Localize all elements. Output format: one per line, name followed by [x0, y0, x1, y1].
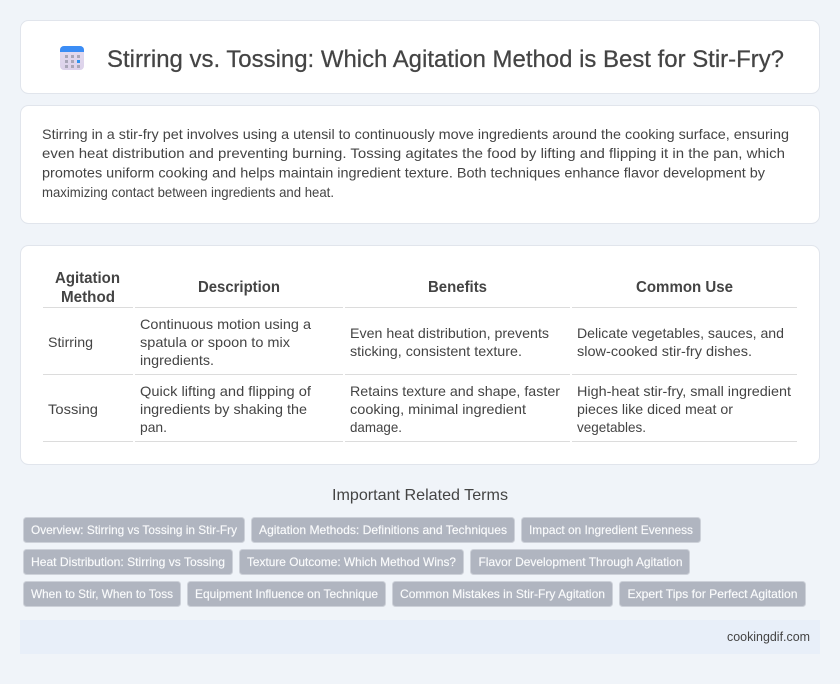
table row: stirring: Delicate vegetables, sauces, and [577, 325, 784, 341]
table row: stirring: Even heat distribution, prevents [350, 325, 549, 341]
intro paragraph: maximizing contact between ingredients and heat. [42, 184, 334, 200]
footer bar [20, 620, 820, 654]
intro paragraph: even heat distribution and preventing burning. Tossing agitates the food by lifting and flipping it in the pan, which [42, 145, 785, 161]
intro paragraph: Stirring in a stir-fry pet involves using a utensil to continuously move ingredients around the cooking surface, ensuring [42, 126, 789, 142]
title: Stirring vs. Tossing: Which Agitation Method is Best for Stir-Fry? [107, 46, 784, 73]
chip: evenness [522, 518, 700, 542]
chip: overview [24, 518, 244, 542]
table row: stirring [48, 316, 784, 368]
table row: stirring: Continuous motion using a [140, 316, 311, 332]
table header [55, 270, 733, 306]
icon: calendar [60, 46, 84, 70]
table row: tossing: pan. [140, 419, 167, 435]
table row: stirring: spatula or spoon to mix [140, 334, 290, 350]
chip: agitation methods: Agitation Methods: Definitions and Techniques [259, 523, 507, 537]
chip: agitation methods [252, 518, 514, 542]
chip: texture outcome: Texture Outcome: Which Method Wins? [247, 555, 456, 569]
table header: Description [198, 279, 280, 296]
related term chips [24, 518, 806, 606]
panel: comparison table [20, 246, 820, 464]
intro paragraph: promotes uniform cooking and helps maintain ingredient texture. Both techniques enhance flavor development by [42, 164, 765, 180]
panel: title card [20, 20, 820, 94]
table row: tossing: Quick lifting and flipping of [140, 383, 311, 399]
table header: Method [61, 289, 115, 306]
chip: when to stir: When to Stir, When to Toss [31, 587, 173, 601]
chip: when to stir [24, 582, 180, 606]
heading: related terms: Important Related Terms [332, 487, 508, 504]
table row: tossing: Tossing [48, 401, 98, 417]
table header: Common Use [636, 279, 733, 296]
table row: stirring: Stirring [48, 334, 93, 350]
table row: tossing: ingredients by shaking the [140, 401, 307, 417]
chip: flavor development [470, 550, 690, 574]
chip: texture outcome [240, 550, 464, 574]
table row: tossing: damage. [350, 419, 402, 435]
table header: Agitation [55, 270, 120, 287]
chip: expert tips [620, 582, 806, 606]
chip: expert tips: Expert Tips for Perfect Agitation [628, 587, 798, 601]
chip: common mistakes [392, 582, 612, 606]
table row: tossing: cooking, minimal ingredient [350, 401, 526, 417]
table header: Benefits [428, 279, 487, 296]
chip: heat distribution: Heat Distribution: Stirring vs Tossing [31, 555, 225, 569]
table row: stirring: ingredients. [140, 352, 214, 368]
table row: tossing: Retains texture and shape, faster [350, 383, 560, 399]
chip: common mistakes: Common Mistakes in Stir-Fry Agitation [400, 587, 605, 601]
table row: tossing: vegetables. [577, 419, 646, 435]
panel: intro text [20, 106, 820, 224]
table row: tossing: pieces like diced meat or [577, 401, 733, 417]
footer bar: cookingdif.com [727, 630, 810, 644]
chip: flavor development: Flavor Development Through Agitation [478, 555, 682, 569]
table row: tossing [48, 383, 791, 435]
table row: tossing: High-heat stir-fry, small ingredient [577, 383, 791, 399]
intro paragraph [42, 126, 789, 200]
table row: stirring: sticking, consistent texture. [350, 343, 522, 359]
chip: heat distribution [24, 550, 232, 574]
chip: equipment: Equipment Influence on Technique [195, 587, 378, 601]
table row: stirring: slow-cooked stir-fry dishes. [577, 343, 752, 359]
chip: equipment [188, 582, 386, 606]
chip: evenness: Impact on Ingredient Evenness [529, 523, 693, 537]
chip: overview: Overview: Stirring vs Tossing in Stir-Fry [31, 523, 237, 537]
